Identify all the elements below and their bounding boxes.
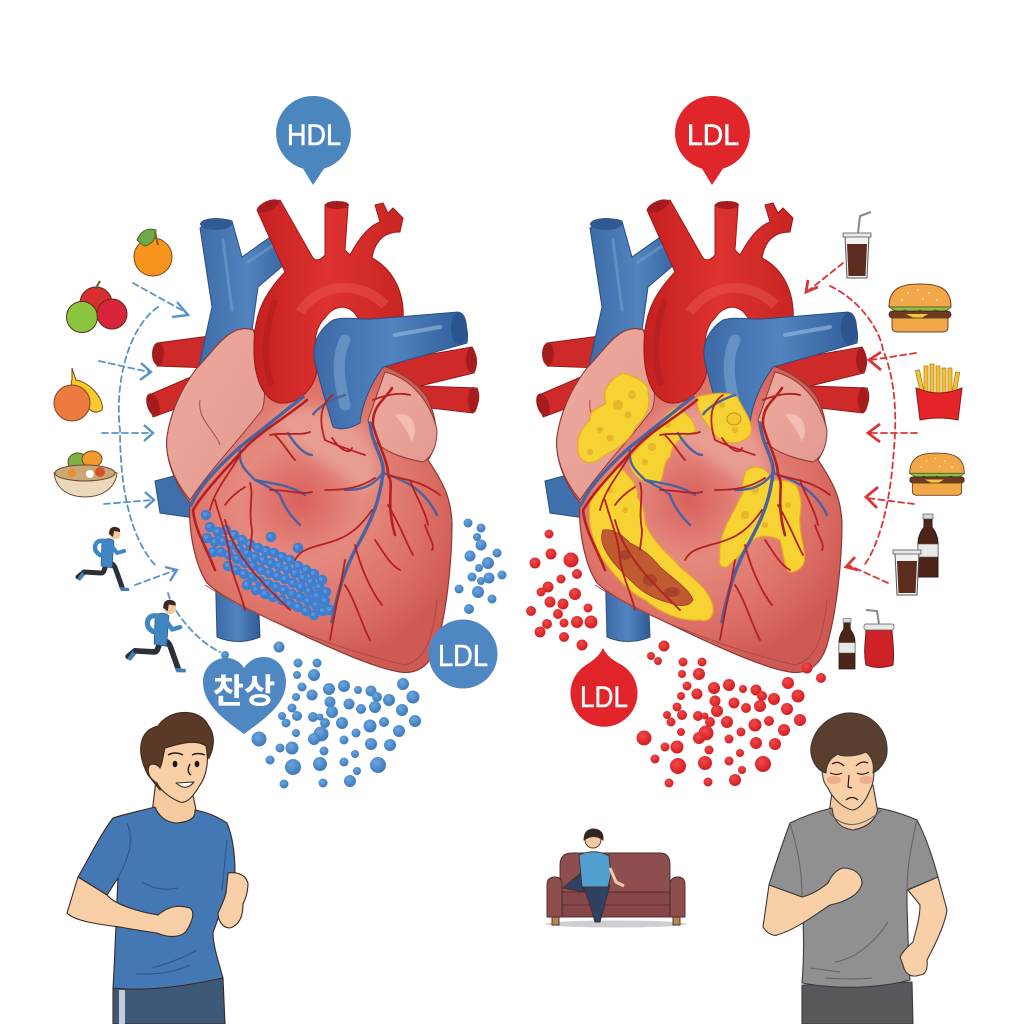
cheeks	[827, 776, 873, 784]
person: happy jogger	[67, 712, 248, 1024]
eyes and smile	[173, 761, 199, 767]
neck	[826, 785, 882, 835]
blue t-shirt	[78, 807, 235, 989]
couch with seated man	[545, 829, 687, 928]
brown necrotic core	[602, 530, 693, 606]
blue HDL particles on heart	[205, 514, 330, 615]
icon: runner top	[77, 527, 129, 591]
icon: salad bowl	[54, 451, 117, 497]
icon: apples	[66, 281, 127, 332]
badge: LDL blue	[428, 620, 498, 688]
arm left	[763, 868, 862, 935]
shirt creases	[790, 810, 917, 979]
pants	[113, 978, 225, 1024]
badge: heart praise	[203, 657, 286, 734]
icon: orange	[134, 229, 172, 276]
blue dashed arrows	[99, 283, 220, 652]
face	[822, 745, 874, 810]
blue particles below heart	[252, 642, 421, 788]
right heart	[534, 197, 869, 672]
pants	[802, 982, 913, 1024]
red dashed arrows	[806, 263, 917, 583]
icon: cola bottle and red cup	[839, 610, 894, 669]
badge: LDL red drop	[570, 648, 637, 727]
icon: peach and banana	[54, 368, 102, 421]
blue particles right of heart	[221, 518, 506, 659]
badge: heart praise: 찬상	[213, 664, 275, 713]
person: tired man	[763, 713, 947, 1024]
face	[148, 742, 207, 802]
grey t-shirt	[769, 808, 938, 987]
yellow plaque deposits	[578, 373, 805, 620]
icon: runner bottom	[127, 600, 186, 672]
badge: LDL red drop: LDL	[580, 681, 628, 714]
eyes and mouth	[830, 762, 869, 800]
hand right	[218, 873, 248, 928]
hair	[811, 713, 887, 773]
badge: LDL blue: LDL	[438, 638, 488, 673]
red particles other	[526, 530, 826, 683]
left heart	[144, 197, 479, 672]
neck	[150, 780, 200, 830]
icon: burger large	[889, 284, 951, 332]
hair back	[141, 712, 213, 790]
arm left	[67, 877, 193, 936]
icon: burger small	[910, 453, 964, 495]
arm right	[900, 877, 947, 976]
badge: HDL	[276, 96, 351, 185]
badge: LDL top: LDL	[687, 119, 739, 152]
icon: soda cup	[843, 212, 871, 278]
plaque pores	[587, 391, 791, 597]
icon: cola bottle and glass	[893, 514, 938, 595]
shirt creases	[118, 823, 227, 974]
icon: fries	[916, 364, 962, 420]
badge: LDL top	[675, 96, 750, 185]
yellow spot at aorta base	[727, 413, 741, 425]
red particles below heart	[636, 640, 806, 788]
badge: HDL: HDL	[287, 119, 341, 152]
